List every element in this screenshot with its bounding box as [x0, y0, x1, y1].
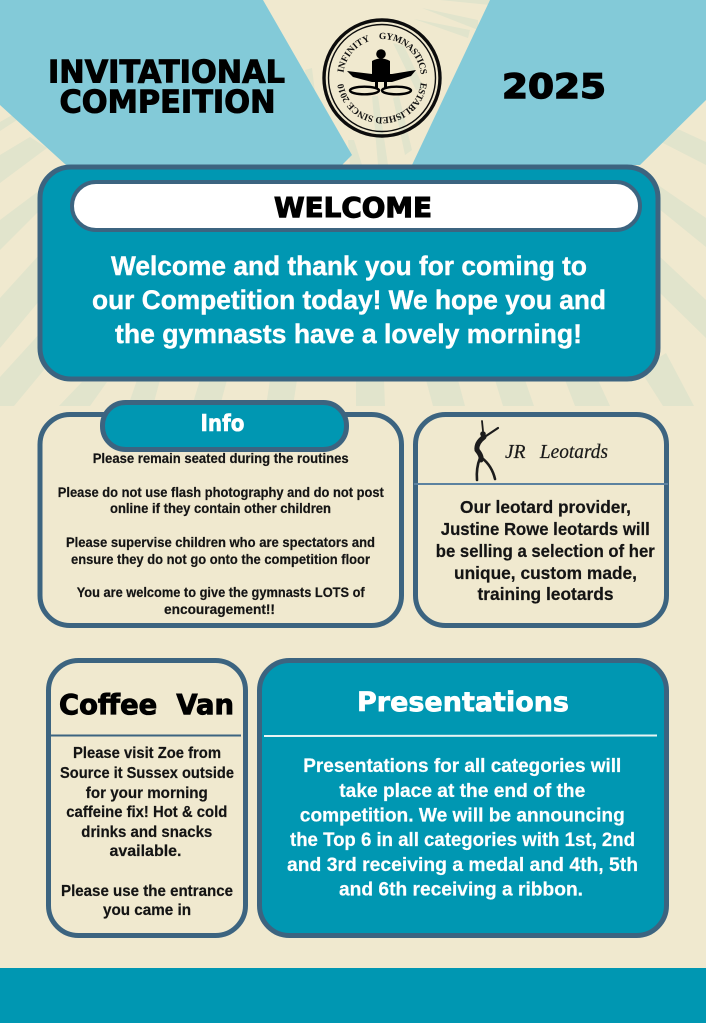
coffee van description: Please visit Zoe from: [73, 745, 221, 762]
welcome message: [92, 251, 606, 349]
leotards description: unique, custom made,: [454, 563, 637, 583]
footer bar: [0, 968, 706, 1023]
coffee van description: Source it Sussex outside: [60, 765, 234, 782]
coffee van description: [60, 745, 234, 919]
info rules text: Please do not use flash photography and do not post: [58, 485, 384, 500]
leotards description: [436, 497, 655, 604]
panel: presentations: [260, 660, 666, 936]
gymnastics club logo: [322, 18, 442, 138]
coffee van description: drinks and snacks: [81, 824, 212, 841]
presentations heading: Presentations: [357, 687, 569, 718]
info rules text: You are welcome to give the gymnasts LOTS of: [77, 585, 365, 600]
presentations description: and 6th receiving a ribbon.: [339, 880, 583, 900]
info rules text: encouragement!!: [164, 602, 275, 617]
leotards description: Our leotard provider,: [460, 497, 631, 517]
leotards description: training leotards: [478, 584, 614, 604]
coffee van heading: Coffee Van: [59, 689, 234, 721]
coffee van description: caffeine fix! Hot & cold: [66, 804, 227, 821]
presentations description: and 3rd receiving a medal and 4th, 5th: [287, 855, 638, 876]
coffee van description: for your morning: [86, 785, 208, 802]
background sunburst rays: [0, 0, 706, 406]
welcome heading pill: [72, 182, 640, 230]
coffee van description: Please use the entrance: [61, 883, 233, 900]
title: [48, 54, 285, 120]
welcome message: Welcome and thank you for coming to: [111, 251, 587, 281]
title: INVITATIONAL: [48, 54, 285, 90]
info rules text: Please remain seated during the routines: [93, 451, 349, 466]
panel: coffee van: [48, 660, 246, 936]
presentations description: Presentations for all categories will: [303, 756, 621, 777]
coffee van description: you came in: [103, 902, 191, 919]
coffee van description: available.: [110, 843, 182, 860]
year: 2025: [502, 67, 606, 106]
icon: leotard dancer logo: [477, 421, 498, 480]
info rules text: online if they contain other children: [110, 501, 331, 516]
info heading pill: Info: [200, 411, 244, 437]
welcome message: the gymnasts have a lovely morning!: [115, 319, 582, 349]
presentations description: competition. We will be announcing: [300, 806, 625, 826]
leotards description: be selling a selection of her: [436, 541, 655, 561]
leotards description: Justine Rowe leotards will: [441, 519, 650, 539]
header blue banner right: [412, 0, 706, 165]
gymnastics club logo: GYMNASTICS: [379, 32, 427, 74]
info heading pill: [102, 402, 346, 450]
panel: info: [40, 402, 402, 626]
gymnastics club logo: INFINITY: [337, 35, 369, 72]
panel: leotards: [414, 414, 668, 626]
panel: welcome: [40, 167, 658, 379]
info rules text: [58, 451, 384, 617]
presentations description: [287, 756, 638, 900]
leotards logo wordmark: JR Leotards: [505, 441, 608, 463]
gymnastics club logo: ESTABLISHED SINCE 2010: [338, 82, 427, 124]
info rules text: Please supervise children who are spectators and: [66, 535, 375, 550]
welcome message: our Competition today! We hope you and: [92, 285, 606, 315]
header blue banner left: [0, 0, 352, 165]
presentations description: the Top 6 in all categories with 1st, 2nd: [290, 830, 635, 851]
info rules text: ensure they do not go onto the competition floor: [71, 552, 371, 567]
title: COMPEITION: [60, 84, 276, 120]
welcome heading pill: WELCOME: [274, 192, 432, 224]
presentations description: take place at the end of the: [339, 781, 585, 802]
